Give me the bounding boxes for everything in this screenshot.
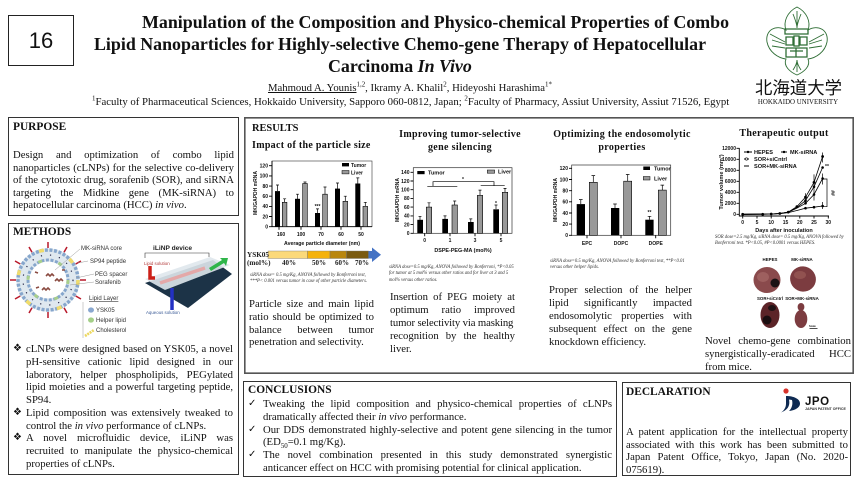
labels: nanoparticle components: YSK05 — [96, 308, 115, 314]
line chart: tumor volume: 8000 — [725, 168, 736, 174]
photos: excised tumors: HEPES — [763, 257, 778, 262]
methods bullets: recruited to manipulate the physico-chemical — [26, 445, 233, 457]
title: Lipid Nanoparticles for Highly-selective Chemo-gene Therapy of Hepatocellular — [94, 34, 706, 54]
declaration text: 075619). — [626, 464, 664, 476]
conclusions checkmarks: ✓ — [248, 449, 256, 460]
bar chart: PEG ratio: 20 — [404, 222, 410, 228]
conclusions text: Our DDS demonstrated highly-selective and potent gene silencing in the tumor — [263, 424, 612, 436]
heading: purpose: PURPOSE — [13, 121, 66, 133]
line chart: tumor volume: SOR+siCntrl — [754, 157, 788, 163]
labels: nanoparticle components: Cholesterol — [96, 328, 126, 334]
bar chart: PEG ratio — [395, 168, 512, 254]
line chart: tumor volume: 0 — [741, 220, 744, 226]
bar chart: particle size: 70 — [318, 232, 324, 238]
text: therapeutic takeaway: from mice. — [705, 361, 752, 373]
arrow: YSK05 ratio scale: 40% — [282, 259, 296, 267]
bar chart: particle size: Liver — [351, 170, 363, 176]
arrow: YSK05 ratio scale — [247, 248, 381, 267]
subheading: tumor-selective gene silencing: gene silencing — [428, 142, 492, 153]
diagram: iLiNP device: iLiNP device — [153, 245, 192, 252]
subheading: impact of particle size: Impact of the particle size — [252, 140, 371, 151]
bar chart: helper lipid: 20 — [562, 222, 568, 228]
purpose text: of the cytotoxic drug, sorafenib (SOR), and siRNA — [13, 174, 234, 186]
bar chart: PEG ratio: 0 — [407, 231, 410, 237]
line chart: tumor volume: MK-siRNA — [790, 150, 817, 156]
line chart: tumor volume: 25 — [811, 220, 817, 226]
conclusions text: dramatically affected their in vivo performance. — [263, 411, 466, 423]
legend swatches: lipid layer — [85, 307, 94, 336]
bar chart: PEG ratio: Liver — [498, 170, 512, 176]
conclusions text: anticancer effect on HCC with promising potential for clinical application. — [263, 462, 582, 474]
logo: JPO — [781, 388, 847, 412]
bar chart: particle size: 160 — [277, 232, 285, 238]
text: PEG takeaway: tumor selectivity via masking — [390, 317, 513, 329]
photos: excised tumors — [754, 257, 820, 329]
text: PEG takeaway: optimum ratio improved — [390, 304, 515, 316]
bar chart: helper lipid: 100 — [560, 177, 568, 183]
arrow: YSK05 ratio scale: (mol%) — [247, 259, 271, 267]
purpose text: Design and optimization of combo lipid — [13, 149, 234, 161]
bar chart: helper lipid: 80 — [562, 188, 568, 194]
bar chart: particle size: 0 — [265, 224, 268, 230]
line chart: tumor volume: 2000 — [725, 201, 736, 207]
bar chart: particle size: Average particle diameter (nm) — [284, 241, 360, 247]
diagram: iLiNP device: Lipid solution — [144, 261, 170, 266]
bar chart: PEG ratio: * — [495, 201, 497, 207]
line chart: tumor volume: 30 — [826, 220, 831, 226]
labels: nanoparticle components: PEG spacer — [95, 272, 127, 278]
bar chart: helper lipid: ** — [648, 210, 651, 216]
heading: results: RESULTS — [252, 123, 298, 134]
bar chart: particle size: 40 — [262, 204, 268, 210]
photos: excised tumors: SOR+MK-siRNA — [785, 296, 820, 301]
bar chart: PEG ratio: 100 — [401, 188, 410, 194]
arrow: YSK05 ratio scale: 70% — [355, 259, 369, 267]
declaration text: associated with this work has been submitted to — [626, 439, 848, 451]
line chart: tumor volume: 6000 — [725, 179, 736, 185]
subheading: therapeutic output: Therapeutic output — [739, 128, 829, 139]
bar chart: helper lipid: Liver — [654, 176, 668, 182]
purpose text: nanoparticles (cLNPs) for the selective co-delivery — [13, 162, 234, 174]
poster number box: 16 — [29, 28, 53, 53]
diagram: iLiNP device: Aqueous solution — [146, 310, 180, 315]
poster number box — [8, 15, 74, 66]
text: PEG takeaway: liver. — [390, 343, 412, 355]
line chart: tumor volume: ## — [829, 190, 835, 196]
text: helper lipid takeaway: subsequent effect on the gene — [549, 323, 692, 335]
title — [94, 12, 729, 76]
methods bullets: laboratory, helper phospholipids, PEGylated — [26, 368, 233, 380]
text: particle size takeaway — [249, 298, 374, 348]
bar chart: particle size: *** — [315, 204, 320, 210]
line chart: tumor volume: 10 — [768, 220, 774, 226]
bar chart: particle size: 80 — [262, 184, 268, 190]
panel: conclusions — [243, 381, 617, 477]
methods bullets: A novel microfluidic device, iLiNP was — [26, 432, 233, 444]
text: particle size takeaway: Particle size and main lipid — [249, 298, 374, 310]
declaration text: Japan Patent Office, Tokyo, Japan (No. 2020- — [626, 451, 848, 463]
methods bullets: lipid moieties and a powerful targeting peptide, — [26, 381, 233, 393]
labels: nanoparticle components: SP94 peptide — [90, 259, 127, 265]
bar chart: helper lipid: MK/GAPDH mRNA — [553, 178, 559, 222]
bar chart: helper lipid: 0 — [565, 233, 568, 239]
arrow: YSK05 ratio scale: 50% — [312, 259, 326, 267]
bar chart: helper lipid: DOPE — [649, 241, 663, 247]
title: Manipulation of the Composition and Physico-chemical Properties of Combo — [142, 12, 729, 32]
footnote: therapeutic output: SOR dose=2.5 mg/Kg, siRNA dose= 0.5 mg/Kg, ANOVA followed by Bonferroni test. *P<0.05, #P<0.0001 versus HEPES. — [715, 235, 844, 246]
bar chart: PEG ratio: * — [462, 177, 464, 183]
labels: nanoparticle components: MK-siRNA core — [81, 246, 123, 252]
bar chart: PEG ratio: Tumor — [428, 170, 446, 176]
bar chart: helper lipid — [553, 165, 672, 247]
line chart: tumor volume: Tumor volume (mm³) — [718, 154, 725, 210]
line chart: tumor volume: SOR+MK-siRNA — [754, 164, 797, 170]
text: particle size takeaway: penetration and selectivity. — [249, 336, 364, 348]
conclusions checkmarks: ✓ — [248, 398, 256, 409]
logo: JPO: JPO — [805, 396, 830, 408]
methods bullets: SP94. — [26, 394, 51, 406]
subheading: endosomolytic properties: properties — [598, 142, 646, 153]
heading: methods: METHODS — [13, 226, 71, 238]
subheading: tumor-selective gene silencing: Improving tumor-selective — [399, 129, 521, 140]
text: helper lipid takeaway: knockdown efficiency. — [549, 336, 646, 348]
text: helper lipid takeaway: endosomolytic properties with — [549, 310, 692, 322]
text: PEG takeaway — [390, 290, 515, 355]
photos: excised tumors: MK-siRNA — [791, 257, 814, 262]
declaration text: A patent application for the intellectual property — [626, 426, 848, 438]
logo: Hokkaido University — [755, 6, 842, 106]
purpose text: hepatocellular carcinoma (HCC) in vivo. — [13, 199, 187, 211]
line chart: tumor volume: 10000 — [722, 157, 736, 163]
bar chart: particle size: 100 — [260, 174, 268, 180]
bar chart: particle size — [253, 161, 372, 247]
bar chart: particle size: 50 — [358, 232, 364, 238]
declaration text — [626, 426, 848, 476]
subheading: endosomolytic properties — [553, 129, 691, 153]
bar chart: particle size: Tumor — [351, 163, 366, 169]
text: helper lipid takeaway: lipid significantly impacted — [549, 297, 692, 309]
footnote: PEG ratio: siRNA dose=0.5 mg/Kg, ANOVA followed by Bonferroni, *P<0.05 for tumor at 5 mol% versus other ratios and for liver at 3 and 5 mol% versus other ratios. — [389, 265, 514, 283]
bar chart: helper lipid: DOPC — [614, 241, 629, 247]
text: therapeutic takeaway: Novel chemo-gene combination — [705, 335, 851, 347]
line chart: tumor volume: 12000 — [722, 146, 736, 152]
methods bullets: pH-sensitive cationic lipid designed in our — [26, 356, 233, 368]
text: therapeutic takeaway — [705, 335, 851, 373]
bar chart: PEG ratio: 60 — [404, 205, 410, 211]
panel: declaration — [622, 382, 851, 476]
diagram: lipid nanoparticle — [10, 242, 86, 318]
title: Carcinoma In Vivo — [328, 56, 472, 76]
subheading: tumor-selective gene silencing — [399, 129, 521, 153]
text: PEG takeaway: recognition by the healthy — [390, 330, 515, 342]
labels: nanoparticle components: Sorafenib — [95, 280, 121, 286]
bar chart: PEG ratio: 5 — [500, 238, 503, 244]
logo: Hokkaido University: 北海道大学 — [755, 78, 842, 98]
bar chart: PEG ratio: 3 — [474, 238, 477, 244]
text: helper lipid takeaway — [549, 284, 692, 348]
text: therapeutic takeaway: synergistically-eradicated HCC — [705, 348, 851, 360]
footnote: particle size: ***P< 0.001 versus tumor in case of other particle diameters. — [250, 279, 367, 284]
text: particle size takeaway: ratio should be optimized to — [249, 311, 374, 323]
arrow: YSK05 ratio scale: YSK05 — [247, 251, 269, 259]
photos: excised tumors: SOR+siCntrl — [757, 296, 783, 301]
conclusions text: Tweaking the lipid composition and physico-chemical properties of cLNPs — [263, 398, 612, 410]
methods bullets — [13, 343, 233, 470]
bar chart: PEG ratio: DSPE-PEG-MA (mol%) — [434, 248, 492, 254]
bar chart: helper lipid: 120 — [560, 166, 568, 172]
arrow: YSK05 ratio scale: 60% — [335, 259, 349, 267]
conclusions checkmarks — [248, 398, 256, 460]
methods bullets: cLNPs were designed based on YSK05, a novel — [26, 343, 233, 355]
line chart: tumor volume: 4000 — [725, 190, 736, 196]
heading: declaration: DECLARATION — [626, 386, 711, 398]
line chart: tumor volume: Days after inoculation — [755, 228, 813, 234]
diagram: iLiNP device — [144, 245, 232, 315]
line chart: tumor volume: 20 — [797, 220, 803, 226]
text: helper lipid takeaway: Proper selection of the helper — [549, 284, 692, 296]
conclusions text: (ED50=0.1 mg/Kg). — [263, 436, 346, 451]
conclusions text — [263, 398, 612, 474]
labels: nanoparticle components — [81, 246, 127, 334]
methods bullets: control the in vivo performance of cLNPs. — [26, 420, 206, 432]
line chart: tumor volume: 15 — [783, 220, 788, 226]
bar chart: particle size: 60 — [262, 194, 268, 200]
panel: results — [244, 117, 854, 374]
bar chart: particle size: MK/GAPDH mRNA — [253, 171, 259, 215]
authors: Mahmoud A. Younis1,2, Ikramy A. Khalil2, Hideyoshi Harashima1* — [268, 80, 552, 94]
bar chart: particle size: 20 — [262, 214, 268, 220]
labels: nanoparticle components: Helper lipid — [96, 318, 126, 324]
methods bullets: ❖ — [13, 407, 22, 418]
text: PEG takeaway: Insertion of PEG moiety at — [390, 290, 515, 302]
footnote: particle size: siRNA dose= 0.5 mg/Kg, ANOVA followed by Bonferroni test, — [250, 273, 366, 278]
bar chart: helper lipid: EPC — [582, 241, 593, 247]
line chart: tumor volume — [718, 146, 835, 234]
photos: excised tumors: Scale — [809, 324, 816, 328]
line chart: tumor volume: ** — [825, 164, 829, 170]
purpose text — [13, 149, 234, 211]
conclusions checkmarks: ✓ — [248, 424, 256, 435]
labels: nanoparticle components: Lipid Layer — [89, 296, 118, 302]
bar chart: PEG ratio: 80 — [404, 196, 410, 202]
methods bullets: ❖ — [13, 343, 22, 354]
bar chart: helper lipid: 60 — [562, 200, 568, 206]
conclusions text: The novel combination presented in this study demonstrated synergistic — [263, 449, 612, 461]
bar chart: helper lipid: 40 — [562, 211, 568, 217]
methods bullets: Lipid composition was extensively tweaked to — [26, 407, 233, 419]
leader lines — [55, 249, 94, 338]
purpose text: targeting the Midkine gene (MK-siRNA) to — [13, 187, 234, 199]
bar chart: PEG ratio: 140 — [401, 170, 410, 176]
logo: Hokkaido University: HOKKAIDO UNIVERSITY — [758, 99, 838, 106]
text: particle size takeaway: balance between tumor — [249, 324, 374, 336]
panel: methods — [8, 223, 239, 475]
bar chart: particle size: 120 — [260, 164, 268, 170]
logo: JPO: JAPAN PATENT OFFICE — [805, 407, 847, 411]
line chart: tumor volume: 5 — [756, 220, 759, 226]
footnote: helper lipid: siRNA dose=0.5 mg/Kg, ANOVA followed by Bonferroni test, **P<0.01 versus other helper lipids. — [550, 259, 685, 270]
bar chart: helper lipid: Tumor — [654, 166, 672, 172]
line chart: tumor volume: 0 — [733, 212, 736, 218]
bar chart: PEG ratio: 0 — [423, 238, 426, 244]
bar chart: particle size: 60 — [338, 232, 344, 238]
methods bullets: properties of cLNPs. — [26, 458, 115, 470]
footnote: particle size — [250, 272, 367, 284]
affiliations: 1Faculty of Pharmaceutical Sciences, Hokkaido University, Sapporo 060-0812, Japan; 2Faculty of Pharmacy, Assiut University, Assiut 71526, Egypt — [92, 94, 729, 108]
bar chart: PEG ratio: 40 — [404, 214, 410, 220]
methods bullets: ❖ — [13, 432, 22, 443]
bar chart: PEG ratio: 120 — [401, 179, 410, 185]
heading: conclusions: CONCLUSIONS — [248, 384, 332, 396]
bar chart: PEG ratio: 1 — [449, 238, 452, 244]
subheading: endosomolytic properties: Optimizing the endosomolytic — [553, 129, 691, 140]
bar chart: particle size: 100 — [297, 232, 305, 238]
line chart: tumor volume: HEPES — [754, 150, 773, 156]
panel: purpose — [8, 117, 239, 216]
bar chart: PEG ratio: MK/GAPDH mRNA — [395, 178, 401, 222]
